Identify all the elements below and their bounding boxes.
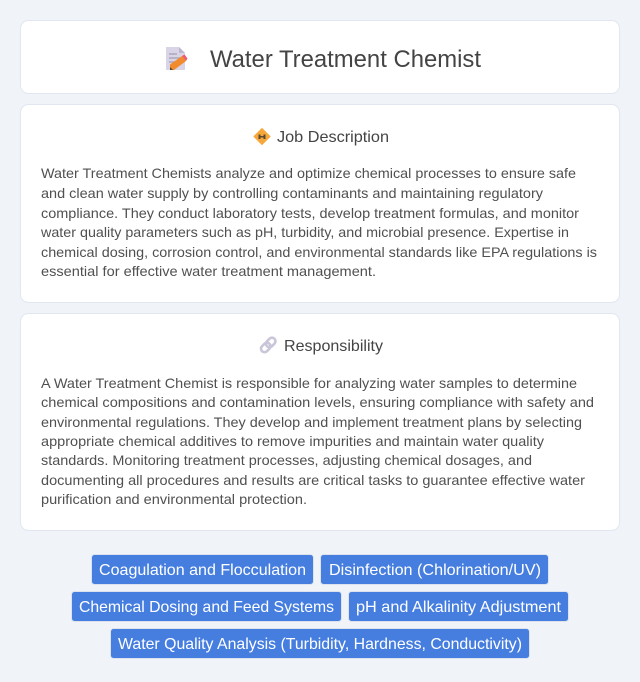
tag: water quality: Water Quality Analysis (Turbidity, Hardness, Conductivity) xyxy=(118,636,522,653)
icon: chain link xyxy=(260,336,277,354)
text block: responsibility: standards. Monitoring treatment processes, adjusting chemical dosages, and xyxy=(41,452,532,468)
panel: responsibility xyxy=(20,314,620,530)
icon: orange diamond sign xyxy=(254,128,270,144)
text block: job description: compliance. They conduct laboratory tests, develop treatment formulas, and monitor xyxy=(41,205,579,221)
tag: chemical dosing: Chemical Dosing and Feed Systems xyxy=(79,599,334,616)
tag: disinfection: Disinfection (Chlorination/UV) xyxy=(329,562,541,579)
panel: job description xyxy=(20,104,620,302)
tag: coagulation xyxy=(92,554,314,584)
heading: job description: Job Description xyxy=(277,129,389,146)
icon: document with pencil xyxy=(166,47,188,70)
tag: chemical dosing xyxy=(72,592,342,622)
text block: responsibility: chemical compositions and contamination levels, ensuring compliance with safety and xyxy=(41,394,594,410)
text block: job description xyxy=(40,165,597,279)
text block: job description: chemical dosing, corrosion control, and environmental standards like EPA regulations is xyxy=(41,244,597,260)
text block: responsibility: documenting all procedures and results are critical tasks to guarantee effective water xyxy=(41,472,585,488)
heading: responsibility: Responsibility xyxy=(284,338,383,355)
text block: responsibility: A Water Treatment Chemist is responsible for analyzing water samples to determine xyxy=(41,375,577,391)
text block: responsibility xyxy=(41,375,594,507)
tag: water quality xyxy=(110,628,530,658)
text block: job description: water quality parameters such as pH, turbidity, and microbial presence. Expertise in xyxy=(40,224,569,240)
text block: responsibility: environmental regulations. They develop and implement treatment plans by selecting xyxy=(41,414,582,430)
tag: pH xyxy=(348,592,568,622)
text block: job description: and clean water supply by controlling contaminants and maintaining regulatory xyxy=(41,185,543,201)
title: Water Treatment Chemist xyxy=(210,46,481,73)
text block: job description: essential for effective water treatment management. xyxy=(41,263,376,279)
skill tags xyxy=(72,554,568,658)
text block: responsibility: appropriate chemical additives to remove impurities and maintain water quality xyxy=(41,433,544,449)
tag: pH: pH and Alkalinity Adjustment xyxy=(356,599,562,616)
text block: responsibility: purification and environmental protection. xyxy=(41,491,307,507)
tag: disinfection xyxy=(320,554,548,584)
text block: job description: Water Treatment Chemists analyze and optimize chemical processes to ensure safe xyxy=(41,165,576,181)
tag: coagulation: Coagulation and Flocculation xyxy=(99,562,306,579)
panel: title card xyxy=(20,20,620,94)
